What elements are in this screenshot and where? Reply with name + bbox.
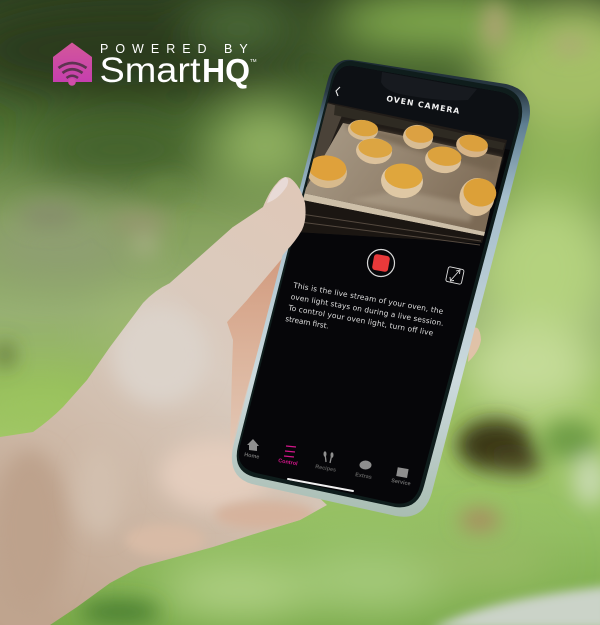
paved path: [430, 586, 600, 625]
nav: extras: [355, 460, 372, 479]
hand shading: [0, 306, 314, 572]
logo trademark: TM: [250, 58, 257, 63]
biscuits: [305, 118, 499, 219]
finger behind the phone: [468, 328, 481, 362]
fullscreen icon: [446, 266, 464, 284]
SmartHQ logo: [53, 42, 257, 90]
logo wordmark: Smart: [100, 51, 201, 90]
webbing shadow: [227, 255, 285, 450]
biscuit 8: [460, 178, 496, 216]
live stream description: [285, 280, 444, 338]
phone screen: [238, 66, 518, 504]
nav: home: Home: [244, 452, 260, 461]
logo wordmark bold part: HQ: [202, 52, 250, 89]
notch: [381, 72, 477, 100]
nav: service: Service: [391, 478, 411, 487]
nav: control: [278, 445, 298, 466]
biscuit 4: [356, 138, 392, 164]
biscuit 5: [425, 146, 462, 174]
biscuit 7: [381, 164, 423, 198]
phone: [220, 50, 540, 520]
live stream description: stream first.: [285, 314, 330, 331]
thumb over the phone: [170, 177, 306, 322]
biscuit 1: [348, 120, 378, 140]
home indicator: [288, 479, 353, 491]
hand behind the phone: wrist, palm and fingers: [0, 227, 481, 625]
biscuit 3: [456, 134, 488, 158]
record button: [368, 250, 394, 276]
nav: control: Control: [278, 458, 298, 467]
phone frame: [232, 60, 530, 517]
oven camera photo: [296, 102, 507, 245]
nav: service: [391, 467, 410, 486]
logo powered by: POWERED BY: [100, 42, 255, 56]
bottom nav: [244, 439, 411, 487]
biscuit 2: [403, 124, 434, 150]
nav: extras: Extras: [355, 472, 372, 481]
logo house icon: [53, 42, 92, 86]
thumb nail: [267, 177, 288, 203]
back chevron: [336, 87, 340, 96]
nav: home: [244, 439, 260, 458]
nav: recipes: [315, 451, 336, 472]
biscuit 6: [308, 155, 347, 188]
live stream description: This is the live stream of your oven, the: [292, 280, 444, 316]
screen title: OVEN CAMERA: [386, 94, 460, 116]
live stream description: To control your oven light, turn off live: [287, 303, 434, 338]
nav: recipes: Recipes: [315, 464, 336, 474]
live stream description: oven light stays on during a live session.: [290, 292, 444, 328]
